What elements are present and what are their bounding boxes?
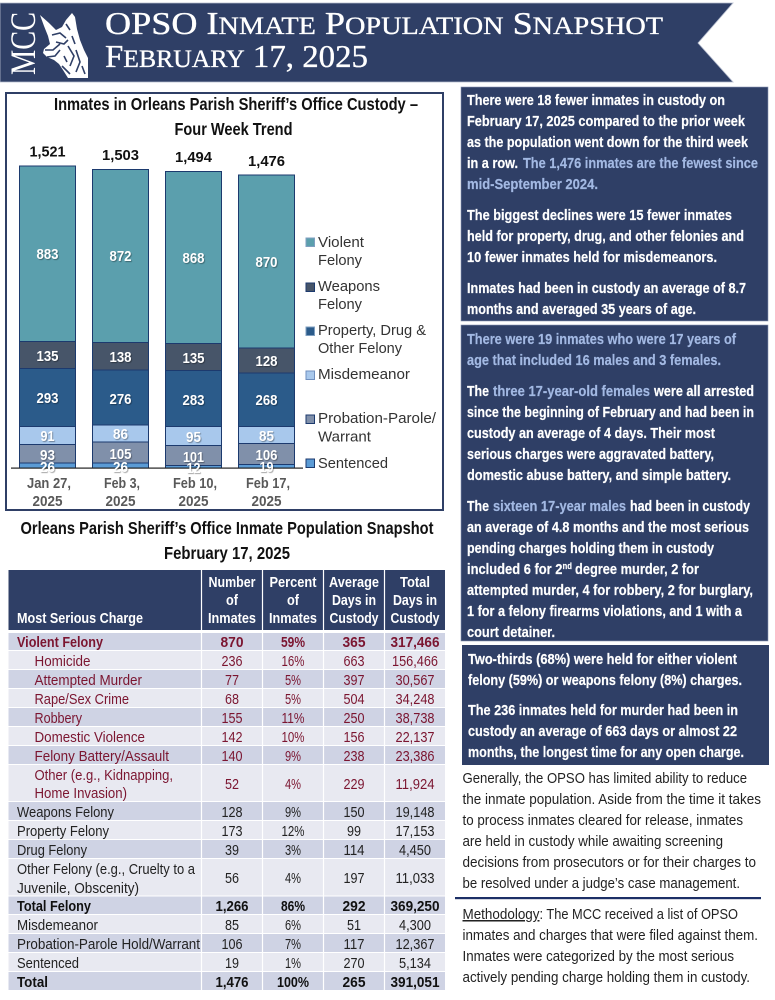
legend: Weapons bbox=[318, 278, 380, 295]
row: Attempted Murder: 77 bbox=[225, 672, 239, 689]
table header row: Days in bbox=[393, 592, 437, 609]
row: Attempted Murder bbox=[8, 670, 445, 689]
table header row: of bbox=[287, 592, 300, 609]
panel: 17-year-olds bbox=[461, 325, 768, 641]
row: Property Felony: Property Felony bbox=[17, 823, 109, 840]
row: Felony Battery/Assault: Felony Battery/Assault bbox=[34, 748, 170, 765]
table header row: Percent bbox=[270, 574, 316, 591]
row: Total: Total bbox=[17, 974, 48, 991]
bar data labels: 91 bbox=[40, 428, 55, 445]
row: Total: 391,051 bbox=[390, 974, 440, 991]
header banner bbox=[0, 3, 733, 82]
text: 18 fewer inmates: There were 18 fewer inmates in custody on bbox=[467, 92, 725, 109]
row: Domestic Violence: 156 bbox=[344, 729, 364, 746]
row: Domestic Violence: Domestic Violence bbox=[34, 729, 145, 746]
chart title: Four Week Trend bbox=[174, 119, 292, 139]
title bbox=[105, 5, 663, 74]
text: 19 inmates aged 17: age that included 16 males and 3 females. bbox=[467, 352, 721, 369]
table header row bbox=[8, 570, 445, 630]
bar totals: 1,494 bbox=[175, 149, 213, 166]
row: Sentenced: 1% bbox=[285, 955, 301, 972]
table header row: Most Serious Charge bbox=[17, 610, 143, 627]
row: Felony Battery/Assault: 140 bbox=[222, 748, 242, 765]
x axis labels: Jan 27, bbox=[27, 475, 71, 492]
text: three females: custody an average of 4 days. Their most bbox=[467, 425, 715, 442]
row: Misdemeanor: 4,300 bbox=[399, 917, 431, 934]
row: Drug Felony: Drug Felony bbox=[17, 842, 87, 859]
row: Domestic Violence: 10% bbox=[282, 729, 304, 746]
text: two-thirds bbox=[468, 651, 742, 689]
row: Probation-Parole Hold/Warrant: 7% bbox=[285, 936, 301, 953]
bar totals: 1,521 bbox=[30, 144, 66, 160]
row: Other violent felony: Other (e.g., Kidnapping, bbox=[34, 767, 173, 784]
text: biggest declines: The biggest declines were 15 fewer inmates bbox=[467, 207, 732, 224]
row: Weapons Felony: 128 bbox=[222, 804, 242, 821]
row: Total Felony: 369,250 bbox=[390, 898, 440, 915]
bar data labels: 872 bbox=[110, 248, 132, 265]
text: biggest declines: 10 fewer inmates held for misdemeanors. bbox=[467, 249, 717, 266]
title: OPSO I NMATE POPULATION SNAPSHOT bbox=[105, 5, 663, 41]
row: Sentenced bbox=[8, 953, 445, 972]
row: Property Felony bbox=[8, 821, 445, 840]
row: Drug Felony: 3% bbox=[285, 842, 301, 859]
bar data labels bbox=[36, 246, 278, 477]
row: Felony Battery/Assault: 238 bbox=[344, 748, 364, 765]
bar data labels: 12 bbox=[186, 460, 200, 477]
bar data labels: 138 bbox=[110, 349, 132, 366]
text: 18 fewer inmates: in a row. bbox=[467, 155, 518, 172]
panel: weekly change summary bbox=[461, 87, 768, 321]
bar data labels: 101 bbox=[183, 449, 204, 466]
row: Robbery: 155 bbox=[222, 710, 242, 727]
row: Other violent felony: 4% bbox=[285, 776, 301, 793]
row: Total: 100% bbox=[277, 974, 309, 991]
bar data labels: 293 bbox=[36, 390, 58, 407]
bar data labels: 95 bbox=[186, 429, 201, 446]
bar data labels: 128 bbox=[256, 353, 278, 370]
bar: Jan 27, 2025 bbox=[20, 166, 76, 468]
row: Rape/Sex Crime: 68 bbox=[225, 691, 239, 708]
bar: Feb 17, 2025 bbox=[238, 175, 294, 468]
row: Homicide: 156,466 bbox=[392, 653, 438, 670]
row: Homicide bbox=[8, 651, 445, 670]
row: Probation-Parole Hold/Warrant bbox=[8, 934, 445, 953]
bar data labels: 135 bbox=[36, 348, 59, 365]
bar: Feb 3, 2025 bbox=[92, 170, 148, 468]
text block: limited ability: to process inmates cleared for release, inmates bbox=[462, 812, 743, 829]
row: Homicide: 16% bbox=[282, 653, 304, 670]
row: Violent Felony bbox=[8, 633, 445, 651]
row: Sentenced: Sentenced bbox=[17, 955, 79, 972]
text: 18 fewer inmates bbox=[467, 92, 758, 193]
table header row: Number bbox=[208, 574, 256, 591]
row: Probation-Parole Hold/Warrant: 117 bbox=[344, 936, 364, 953]
text: sixteen males: included 6 for 2 bbox=[467, 561, 562, 578]
row: Total Felony bbox=[8, 896, 445, 915]
row: Felony Battery/Assault bbox=[8, 746, 445, 765]
x axis labels: 2025 bbox=[252, 493, 282, 510]
bar data labels: 19 bbox=[260, 459, 274, 476]
row: Other violent felony: 229 bbox=[344, 776, 364, 793]
text block: limited ability bbox=[462, 770, 761, 892]
row: Domestic Violence bbox=[8, 727, 445, 746]
row: Total: 265 bbox=[342, 974, 366, 991]
legend: Probation-Parole/ bbox=[318, 410, 437, 427]
table header row: Custody bbox=[330, 610, 379, 627]
x axis labels: Feb 10, bbox=[173, 475, 217, 492]
x axis labels: 2025 bbox=[178, 493, 209, 510]
text: three females: three 17-year-old females bbox=[493, 383, 650, 400]
bar totals: 1,476 bbox=[248, 153, 285, 170]
row: Violent Felony: Violent Felony bbox=[17, 634, 103, 651]
table header row: of bbox=[226, 592, 239, 609]
row: Total Felony: 1,266 bbox=[216, 898, 248, 915]
table header row: Days in bbox=[332, 592, 376, 609]
row: Rape/Sex Crime: Rape/Sex Crime bbox=[34, 691, 129, 708]
text block: methodology bbox=[462, 906, 758, 986]
row: Attempted Murder: 397 bbox=[344, 672, 364, 689]
row: Weapons Felony: 19,148 bbox=[396, 804, 434, 821]
text block: methodology: Methodology bbox=[462, 906, 540, 923]
table header row: Inmates bbox=[208, 610, 256, 627]
row: Violent Felony: 317,466 bbox=[390, 634, 440, 651]
row: Rape/Sex Crime bbox=[8, 689, 445, 708]
text: sixteen males: degree murder, 2 for bbox=[575, 561, 699, 578]
row: Violent Felony: 59% bbox=[281, 634, 305, 651]
row: Misdemeanor bbox=[8, 915, 445, 934]
row: Homicide: 236 bbox=[222, 653, 242, 670]
row: Sentenced: 19 bbox=[225, 955, 239, 972]
text: three females: serious charges were aggravated battery, bbox=[467, 446, 714, 463]
text: sixteen males bbox=[467, 498, 753, 641]
row: Violent Felony: 365 bbox=[342, 634, 366, 651]
row: Weapons Felony: Weapons Felony bbox=[17, 804, 114, 821]
row: Other violent felony: 11,924 bbox=[396, 776, 434, 793]
text: 19 inmates aged 17 bbox=[467, 331, 737, 369]
text: sixteen males: sixteen 17-year males bbox=[493, 498, 626, 515]
text: average custody and age bbox=[467, 280, 746, 318]
row: Attempted Murder: 5% bbox=[285, 672, 301, 689]
row: Robbery: 250 bbox=[344, 710, 364, 727]
legend: Felony bbox=[318, 252, 362, 269]
legend: Misdemeanor bbox=[318, 366, 410, 383]
row: Rape/Sex Crime: 504 bbox=[344, 691, 364, 708]
bar data labels: 870 bbox=[256, 254, 278, 271]
title: FEBRUARY 17, 2025 bbox=[105, 38, 368, 74]
x axis labels: Feb 17, bbox=[246, 475, 290, 492]
text: 18 fewer inmates: mid-September 2024. bbox=[467, 176, 598, 193]
text: three females: domestic abuse battery, and simple battery. bbox=[467, 467, 731, 484]
row: Other violent felony: 52 bbox=[225, 776, 239, 793]
row: Drug Felony bbox=[8, 840, 445, 859]
legend: Felony bbox=[318, 296, 362, 313]
row: Other Felony: Juvenile, Obscenity) bbox=[17, 880, 139, 897]
row: Rape/Sex Crime: 5% bbox=[285, 691, 301, 708]
row: Drug Felony: 4,450 bbox=[399, 842, 431, 859]
chart title: Inmates in Orleans Parish Sheriff’s Office Custody – bbox=[54, 94, 418, 114]
legend: Property, Drug & bbox=[318, 322, 426, 339]
row: Weapons Felony bbox=[8, 802, 445, 821]
text: three females: were all arrested bbox=[653, 383, 754, 400]
bar data labels: 26 bbox=[113, 459, 128, 476]
text block: methodology: : The MCC received a list of OPSO bbox=[540, 906, 738, 923]
row: Other Felony: 56 bbox=[225, 870, 239, 887]
bar data labels: 868 bbox=[182, 250, 204, 267]
row: Domestic Violence: 22,137 bbox=[396, 729, 434, 746]
text block: limited ability: be resolved under a judge’s case management. bbox=[462, 875, 740, 892]
text: 236 inmates held for murder bbox=[468, 702, 744, 761]
x axis labels: 2025 bbox=[106, 493, 136, 510]
row: Robbery bbox=[8, 708, 445, 727]
row: Probation-Parole Hold/Warrant: Probation-Parole Hold/Warrant bbox=[17, 936, 201, 953]
row: Felony Battery/Assault: 23,386 bbox=[396, 748, 434, 765]
bar data labels: 268 bbox=[256, 392, 278, 409]
legend: Sentenced bbox=[318, 455, 388, 472]
bar data labels: 276 bbox=[110, 391, 132, 408]
table: inmate population snapshot bbox=[8, 570, 445, 991]
row: Other Felony: 11,033 bbox=[396, 870, 434, 887]
row: Total Felony: 86% bbox=[281, 898, 305, 915]
table heading: February 17, 2025 bbox=[164, 543, 290, 563]
row: Total bbox=[8, 972, 445, 991]
text: sixteen males: court detainer. bbox=[467, 624, 555, 641]
row: Domestic Violence: 142 bbox=[222, 729, 242, 746]
row: Violent Felony: 870 bbox=[220, 634, 244, 651]
chart title bbox=[54, 94, 418, 139]
bar: Feb 10, 2025 bbox=[166, 172, 222, 468]
text: sixteen males: The bbox=[467, 498, 489, 515]
row: Property Felony: 173 bbox=[222, 823, 242, 840]
row: Sentenced: 5,134 bbox=[399, 955, 431, 972]
text: three females bbox=[467, 383, 754, 484]
table header row: Custody bbox=[390, 610, 440, 627]
row: Drug Felony: 39 bbox=[225, 842, 239, 859]
text: average custody and age: months and averaged 35 years of age. bbox=[467, 301, 696, 318]
row: Robbery: 38,738 bbox=[396, 710, 434, 727]
bar data labels: 86 bbox=[113, 426, 128, 443]
text: biggest declines bbox=[467, 207, 744, 266]
row: Other Felony: 197 bbox=[344, 870, 364, 887]
table header row: Total bbox=[400, 574, 430, 591]
bar totals: 1,503 bbox=[102, 147, 139, 164]
legend bbox=[306, 234, 437, 472]
bar data labels: 93 bbox=[40, 447, 55, 464]
row: Other Felony: 4% bbox=[285, 870, 301, 887]
row: Misdemeanor: 85 bbox=[225, 917, 239, 934]
row: Total Felony: Total Felony bbox=[17, 898, 91, 915]
row: Homicide: Homicide bbox=[34, 653, 90, 670]
table header row: Average bbox=[329, 574, 379, 591]
row: Misdemeanor: 51 bbox=[347, 917, 361, 934]
row: Total: 1,476 bbox=[216, 974, 248, 991]
panel: violent felony charges bbox=[462, 645, 769, 765]
x axis labels: 2025 bbox=[32, 493, 63, 510]
row: Weapons Felony: 9% bbox=[285, 804, 301, 821]
legend: Violent bbox=[318, 234, 365, 251]
row: Homicide: 663 bbox=[344, 653, 364, 670]
row: Weapons Felony: 150 bbox=[344, 804, 364, 821]
text block: methodology: Inmates were categorized by the most serious bbox=[462, 948, 734, 965]
row: Misdemeanor: Misdemeanor bbox=[17, 917, 98, 934]
row: Attempted Murder: 30,567 bbox=[396, 672, 434, 689]
text: sixteen males: pending charges holding them in custody bbox=[467, 540, 714, 557]
row: Property Felony: 17,153 bbox=[396, 823, 434, 840]
row: Other Felony: Other Felony (e.g., Cruelty to a bbox=[17, 861, 195, 878]
row: Robbery: 11% bbox=[282, 710, 304, 727]
legend: Other Felony bbox=[318, 340, 402, 357]
row: Other violent felony bbox=[8, 765, 445, 802]
row: Robbery: Robbery bbox=[34, 710, 82, 727]
table header row: Inmates bbox=[269, 610, 317, 627]
bar data labels: 85 bbox=[259, 428, 274, 445]
x axis labels bbox=[27, 475, 290, 510]
row: Total Felony: 292 bbox=[342, 898, 366, 915]
row: Attempted Murder: Attempted Murder bbox=[34, 672, 142, 689]
bar data labels: 283 bbox=[182, 392, 204, 409]
bar totals bbox=[30, 144, 285, 170]
text: sixteen males: nd bbox=[562, 561, 572, 572]
table heading bbox=[20, 518, 434, 563]
text block: limited ability: are held in custody while awaiting screening bbox=[462, 833, 723, 850]
row: Misdemeanor: 6% bbox=[285, 917, 301, 934]
text: sixteen males: had been in custody bbox=[630, 498, 750, 515]
row: Rape/Sex Crime: 34,248 bbox=[396, 691, 434, 708]
bar data labels: 883 bbox=[36, 246, 58, 263]
row: Drug Felony: 114 bbox=[344, 842, 364, 859]
row: Property Felony: 99 bbox=[347, 823, 361, 840]
bar data labels: 135 bbox=[182, 350, 205, 367]
panel: four week trend chart bbox=[6, 93, 443, 510]
row: Other violent felony: Home Invasion) bbox=[34, 785, 127, 802]
row: Property Felony: 12% bbox=[282, 823, 304, 840]
row: Other Felony bbox=[8, 859, 445, 897]
row: Felony Battery/Assault: 9% bbox=[285, 748, 301, 765]
row: Probation-Parole Hold/Warrant: 12,367 bbox=[396, 936, 434, 953]
row: Probation-Parole Hold/Warrant: 106 bbox=[222, 936, 242, 953]
bar data labels: 26 bbox=[40, 459, 55, 476]
table heading: Orleans Parish Sheriff’s Office Inmate Population Snapshot bbox=[20, 518, 434, 538]
bar data labels: 106 bbox=[256, 447, 278, 464]
x axis labels: Feb 3, bbox=[104, 475, 140, 492]
bar data labels: 105 bbox=[110, 446, 132, 463]
text: three females: The bbox=[467, 383, 489, 400]
row: Sentenced: 270 bbox=[344, 955, 364, 972]
legend: Warrant bbox=[318, 428, 372, 446]
logo: MCC wolf bbox=[3, 12, 88, 78]
